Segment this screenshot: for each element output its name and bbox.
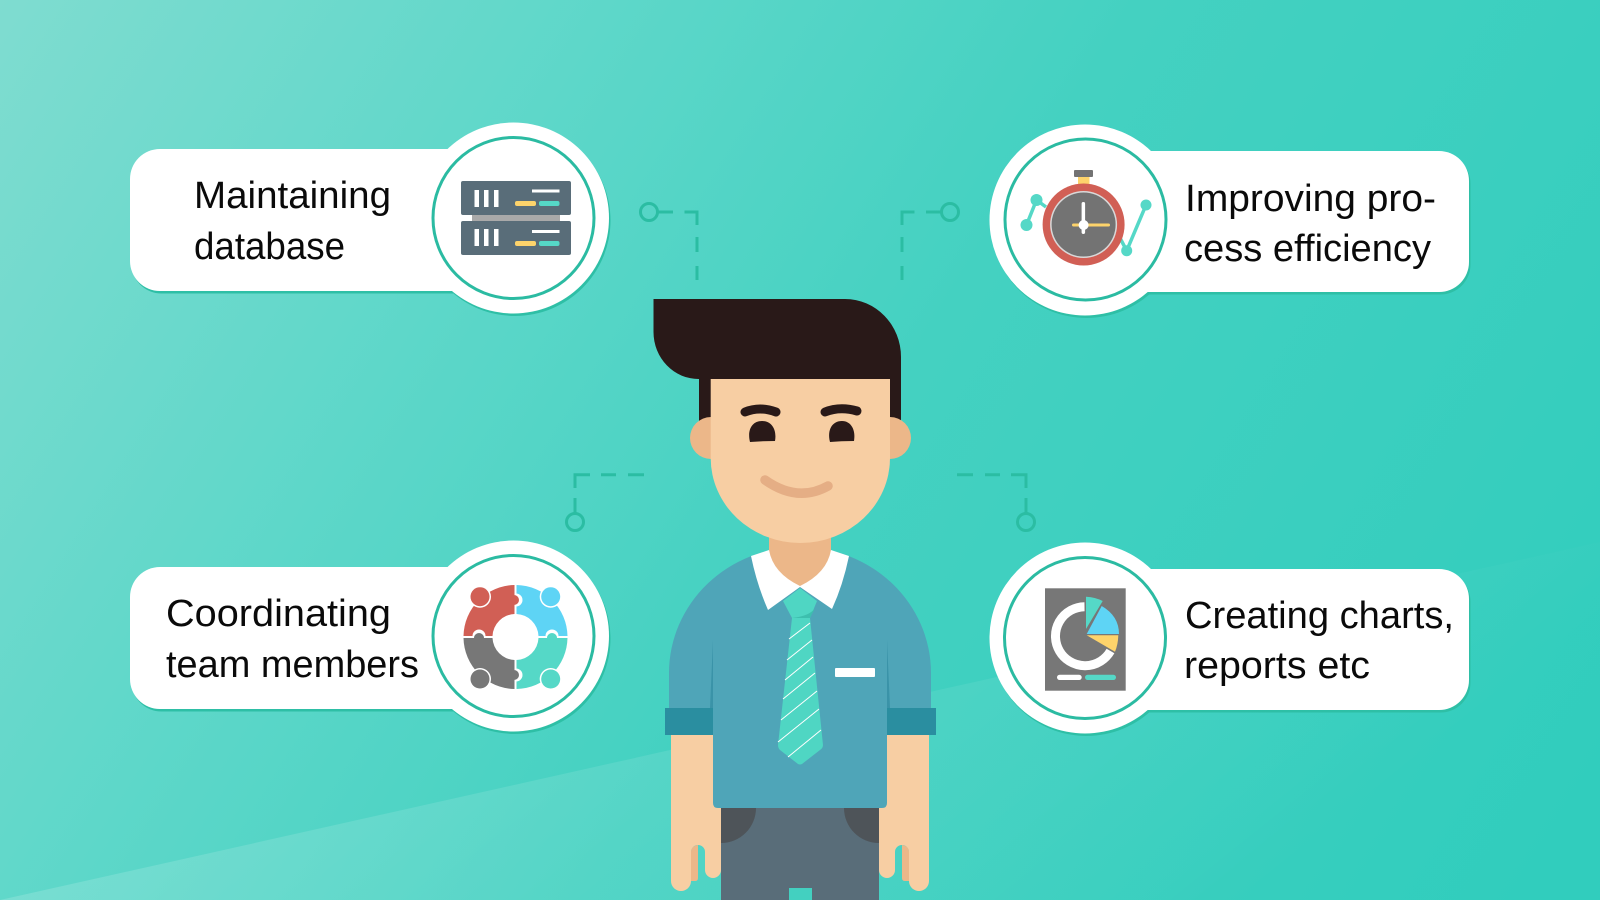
label: improving process efficiency: Improving pro- xyxy=(1185,178,1436,220)
connector: bottom right xyxy=(957,475,1034,530)
panel: maintaining database xyxy=(130,122,610,316)
trousers xyxy=(721,808,879,900)
label: creating charts and reports xyxy=(1184,595,1454,687)
label: coordinating team members xyxy=(166,593,419,686)
icon: chart report document xyxy=(1045,588,1126,691)
label: creating charts and reports: Creating charts, xyxy=(1185,595,1454,637)
panel: improving process efficiency xyxy=(990,124,1470,318)
panel: creating charts and reports xyxy=(990,542,1470,736)
connector: top right xyxy=(902,204,958,280)
label: improving process efficiency xyxy=(1184,178,1436,270)
icon: stopwatch xyxy=(1020,170,1152,266)
label: improving process efficiency: cess efficiency xyxy=(1184,228,1431,270)
hair xyxy=(654,299,901,425)
shirt xyxy=(665,547,936,808)
collar xyxy=(751,550,849,610)
label: coordinating team members: team members xyxy=(166,644,419,686)
icon: server rack xyxy=(461,181,571,255)
icon: puzzle ring xyxy=(464,585,568,690)
connector: top left xyxy=(640,204,697,280)
label: creating charts and reports: reports etc xyxy=(1184,645,1370,687)
left arm xyxy=(671,735,721,891)
face xyxy=(711,379,890,543)
panel: coordinating team members xyxy=(130,540,610,734)
ears xyxy=(690,417,911,459)
label: maintaining database: Maintaining xyxy=(194,175,391,217)
label: maintaining database: database xyxy=(194,226,345,268)
tie xyxy=(778,588,823,764)
label: coordinating team members: Coordinating xyxy=(166,593,391,635)
connector: bottom left xyxy=(566,475,644,530)
right arm xyxy=(879,735,929,891)
neck xyxy=(769,520,831,586)
character: office worker xyxy=(654,299,936,900)
label: maintaining database xyxy=(194,175,391,268)
